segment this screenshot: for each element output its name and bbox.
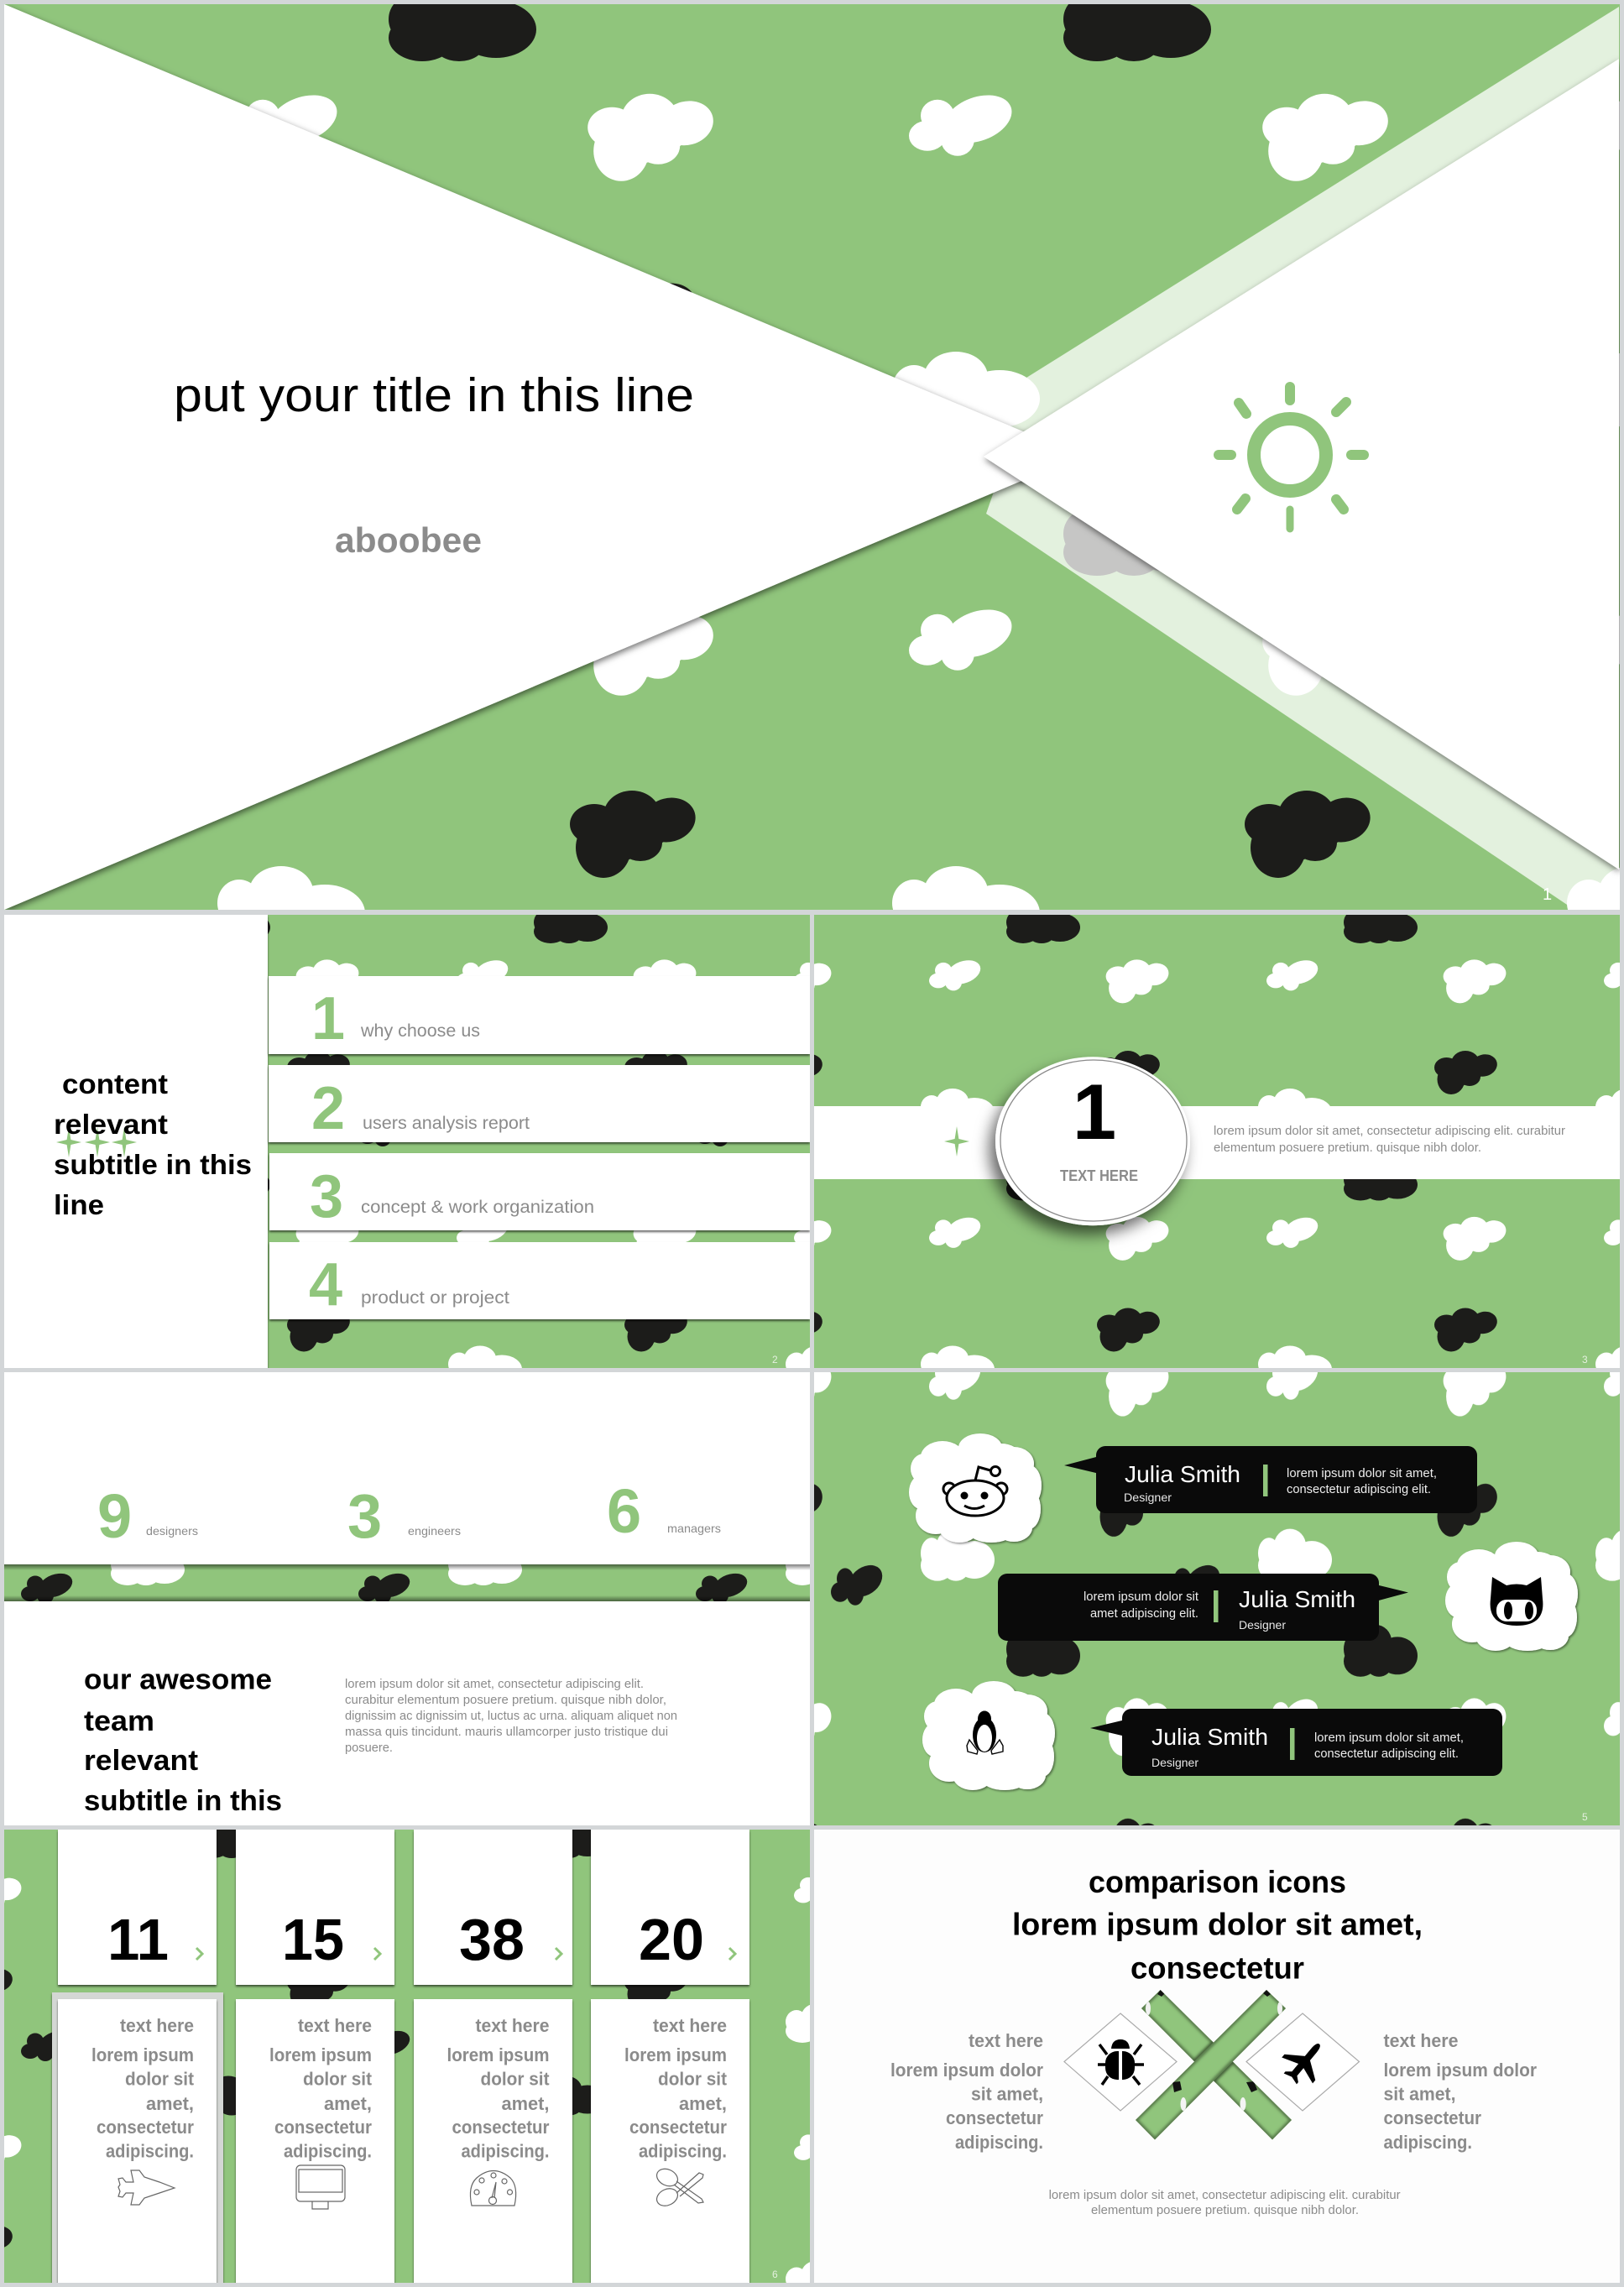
white background: [814, 1830, 1620, 2283]
card column 4: [591, 1830, 749, 2287]
heading: content: [62, 1068, 168, 1099]
callout 2: lorem ipsum dolor sit: [1084, 1590, 1199, 1604]
paragraph: [1214, 1124, 1565, 1155]
heading: line: [54, 1189, 104, 1220]
cloud badge: linux: [922, 1681, 1055, 1790]
heading: relevant: [84, 1745, 198, 1777]
stat: designers: 9: [97, 1481, 132, 1551]
cloud strip: [4, 1564, 810, 1601]
callout 1: Designer: [1124, 1491, 1172, 1504]
contents row 1: 1: [311, 985, 345, 1052]
icon: jet: [118, 2170, 175, 2205]
left text block: text here: [969, 2030, 1043, 2051]
white background: [4, 1372, 810, 1825]
contents row 2: 2: [311, 1075, 345, 1142]
white side panel: [4, 915, 268, 1368]
card column 2: consectetur: [274, 2117, 372, 2138]
icon: sparkle: [944, 1126, 969, 1157]
card column 1: adipiscing.: [106, 2141, 194, 2162]
card column 3: 38: [459, 1907, 525, 1972]
oval badge: TEXT HERE: [1060, 1167, 1138, 1184]
stat: managers: 6: [607, 1476, 641, 1546]
stat: engineers: [347, 1481, 461, 1551]
icon: bug: [1098, 2039, 1144, 2085]
crossed bar falling: [1125, 1985, 1301, 2144]
icon: three sparkles: [56, 1127, 137, 1157]
callout 1: [1064, 1446, 1477, 1513]
contents row 4: 4: [309, 1251, 342, 1318]
card column 1: dolor sit: [125, 2069, 195, 2090]
page number: 1: [1543, 885, 1552, 904]
contents row 4: [269, 1242, 810, 1319]
stat: engineers: engineers: [408, 1524, 461, 1538]
contents row 2: [269, 1065, 810, 1142]
card column 2: amet,: [324, 2093, 372, 2114]
stat: engineers: 3: [347, 1481, 382, 1551]
contents row 3: [269, 1153, 810, 1230]
paragraph: elementum posuere pretium. quisque nibh dolor.: [1214, 1141, 1481, 1155]
crossed bar rising: [1125, 1985, 1301, 2144]
panel: slide 6 stat cards: [4, 1830, 810, 2287]
icon: gauge: [470, 2170, 516, 2206]
bottom paragraph: lorem ipsum dolor sit amet, consectetur adipiscing elit. curabitur: [1049, 2188, 1401, 2202]
contents row 3: 3: [310, 1163, 343, 1230]
icon: reddit: [943, 1467, 1007, 1516]
paragraph: lorem ipsum dolor sit amet, consectetur adipiscing elit. curabitur: [1214, 1124, 1565, 1138]
card column 4: text here: [653, 2015, 727, 2036]
contents row 1: why choose us: [360, 1021, 480, 1041]
icon: plane: [1275, 2031, 1334, 2091]
card column 1: [58, 1830, 217, 2287]
callout 1: Julia Smith: [1125, 1461, 1240, 1487]
cloud pattern background: [268, 915, 810, 1368]
heading: lorem ipsum dolor sit amet,: [1012, 1908, 1423, 1942]
panel: slide 4 team: [4, 1372, 810, 1825]
cloud pattern background: [4, 1830, 810, 2283]
page number: 3: [1582, 1354, 1588, 1365]
contents row 4: product or project: [361, 1288, 509, 1308]
panel: slide 1 title: [4, 4, 1620, 910]
contents row 1: [269, 976, 810, 1054]
page number: 2: [772, 1354, 778, 1365]
card column 1: lorem ipsum: [91, 2044, 194, 2065]
paragraph: massa quis tincidunt. mauris ullamcorper justo tristique dui: [345, 1725, 668, 1739]
card column 3: text here: [475, 2015, 549, 2036]
card column 1: amet,: [146, 2093, 194, 2114]
card column 3: consectetur: [452, 2117, 550, 2138]
page number: 6: [772, 2269, 778, 2280]
white band: [814, 1106, 1620, 1179]
cloud pattern background: [814, 915, 1620, 1368]
right text block: lorem ipsum dolor: [1383, 2060, 1537, 2081]
right text block: [1383, 2030, 1537, 2153]
left text block: adipiscing.: [955, 2132, 1043, 2153]
card column 3: amet,: [502, 2093, 549, 2114]
stat: managers: [607, 1476, 721, 1546]
callout 3: Designer: [1151, 1756, 1198, 1769]
heading: [1012, 1865, 1423, 1986]
heading: our awesome: [84, 1664, 272, 1696]
card column 4: adipiscing.: [639, 2141, 727, 2162]
heading: [54, 1068, 252, 1220]
right text block: sit amet,: [1383, 2083, 1455, 2105]
white right triangle: [984, 59, 1619, 869]
panel: slide 5 people: [814, 1372, 1620, 1825]
card column 2: text here: [298, 2015, 372, 2036]
card column 2: adipiscing.: [284, 2141, 372, 2162]
cloud pattern background: [814, 1372, 1620, 1825]
card column 1: text here: [120, 2015, 194, 2036]
stat: designers: [97, 1481, 198, 1551]
icon: sun: [1219, 387, 1364, 529]
heading: comparison icons: [1089, 1865, 1346, 1899]
bottom paragraph: elementum posuere pretium. quisque nibh dolor.: [1091, 2203, 1359, 2217]
cloud pattern background: [4, 4, 1620, 910]
paragraph: dignissim ac dignissim ut, luctus ac urna. aliquam aliquet non: [345, 1709, 677, 1723]
oval badge: [995, 1057, 1190, 1225]
contents row 3: concept & work organization: [361, 1198, 594, 1217]
icon: monitor: [296, 2165, 345, 2209]
card column 4: lorem ipsum: [624, 2044, 727, 2065]
card column 3: [414, 1830, 572, 2287]
card column 4: amet,: [679, 2093, 727, 2114]
card column 2: 15: [282, 1907, 344, 1972]
card column 2: [236, 1830, 394, 2287]
icon: linux tux: [967, 1710, 1003, 1754]
callout 1: lorem ipsum dolor sit amet,: [1287, 1466, 1437, 1480]
heading: relevant: [54, 1109, 168, 1140]
page number: 5: [1582, 1811, 1588, 1823]
right text block: text here: [1383, 2030, 1459, 2051]
callout 2: [998, 1574, 1408, 1641]
left text block: sit amet,: [971, 2083, 1043, 2105]
cloud badge: github: [1445, 1542, 1578, 1651]
card column 4: dolor sit: [658, 2069, 728, 2090]
oval badge: 1: [1073, 1068, 1116, 1156]
heading: [84, 1664, 282, 1817]
callout 3: lorem ipsum dolor sit amet,: [1314, 1731, 1464, 1745]
card column 1: consectetur: [97, 2117, 194, 2138]
callout 1: consectetur adipiscing elit.: [1287, 1482, 1431, 1496]
bottom paragraph: [1049, 2188, 1401, 2217]
left text block: consectetur: [946, 2107, 1043, 2128]
heading: subtitle in this: [54, 1149, 252, 1180]
card column 2: dolor sit: [303, 2069, 373, 2090]
callout 2: amet adipiscing elit.: [1090, 1606, 1198, 1621]
subtitle text: aboobee: [335, 520, 482, 560]
card column 3: dolor sit: [480, 2069, 550, 2090]
paragraph: lorem ipsum dolor sit amet, consectetur adipiscing elit.: [345, 1677, 644, 1691]
heading: team: [84, 1705, 154, 1737]
left text block: [890, 2030, 1043, 2153]
card column 3: adipiscing.: [462, 2141, 549, 2162]
paragraph: posuere.: [345, 1741, 393, 1755]
heading: consectetur: [1131, 1950, 1304, 1986]
diamond: plane: [1246, 2013, 1360, 2111]
heading: subtitle in this: [84, 1785, 282, 1817]
callout 3: Julia Smith: [1151, 1724, 1268, 1750]
callout 2: Designer: [1239, 1618, 1286, 1632]
card column 4: consectetur: [629, 2117, 727, 2138]
card column 3: lorem ipsum: [446, 2044, 549, 2065]
stat: managers: managers: [667, 1522, 721, 1535]
diamond: bug: [1064, 2013, 1177, 2111]
callout 3: [1090, 1709, 1502, 1776]
left text block: lorem ipsum dolor: [890, 2060, 1043, 2081]
paragraph: curabitur elementum posuere pretium. quisque nibh dolor,: [345, 1693, 666, 1707]
right text block: adipiscing.: [1383, 2132, 1472, 2153]
callout 3: consectetur adipiscing elit.: [1314, 1747, 1459, 1761]
callout 2: Julia Smith: [1239, 1586, 1355, 1612]
icon: scissors: [654, 2165, 703, 2209]
white left triangle: [4, 4, 1081, 910]
pale diagonal strips: [984, 7, 1619, 910]
contents row 2: users analysis report: [363, 1114, 530, 1133]
icon: github octocat: [1491, 1577, 1543, 1626]
card column 2: lorem ipsum: [269, 2044, 372, 2065]
paragraph: [345, 1677, 677, 1755]
title text: put your title in this line: [174, 368, 694, 422]
card column 1: 11: [107, 1907, 169, 1972]
panel: slide 3 section: [814, 915, 1620, 1368]
selection frame: [52, 1992, 223, 2287]
cloud badge: reddit: [909, 1433, 1042, 1543]
panel: slide 7 comparison: [814, 1830, 1620, 2283]
right text block: consectetur: [1383, 2107, 1481, 2128]
stat: designers: designers: [146, 1524, 198, 1538]
panel: slide 2 contents: [4, 915, 810, 1368]
card column 4: 20: [639, 1907, 704, 1972]
